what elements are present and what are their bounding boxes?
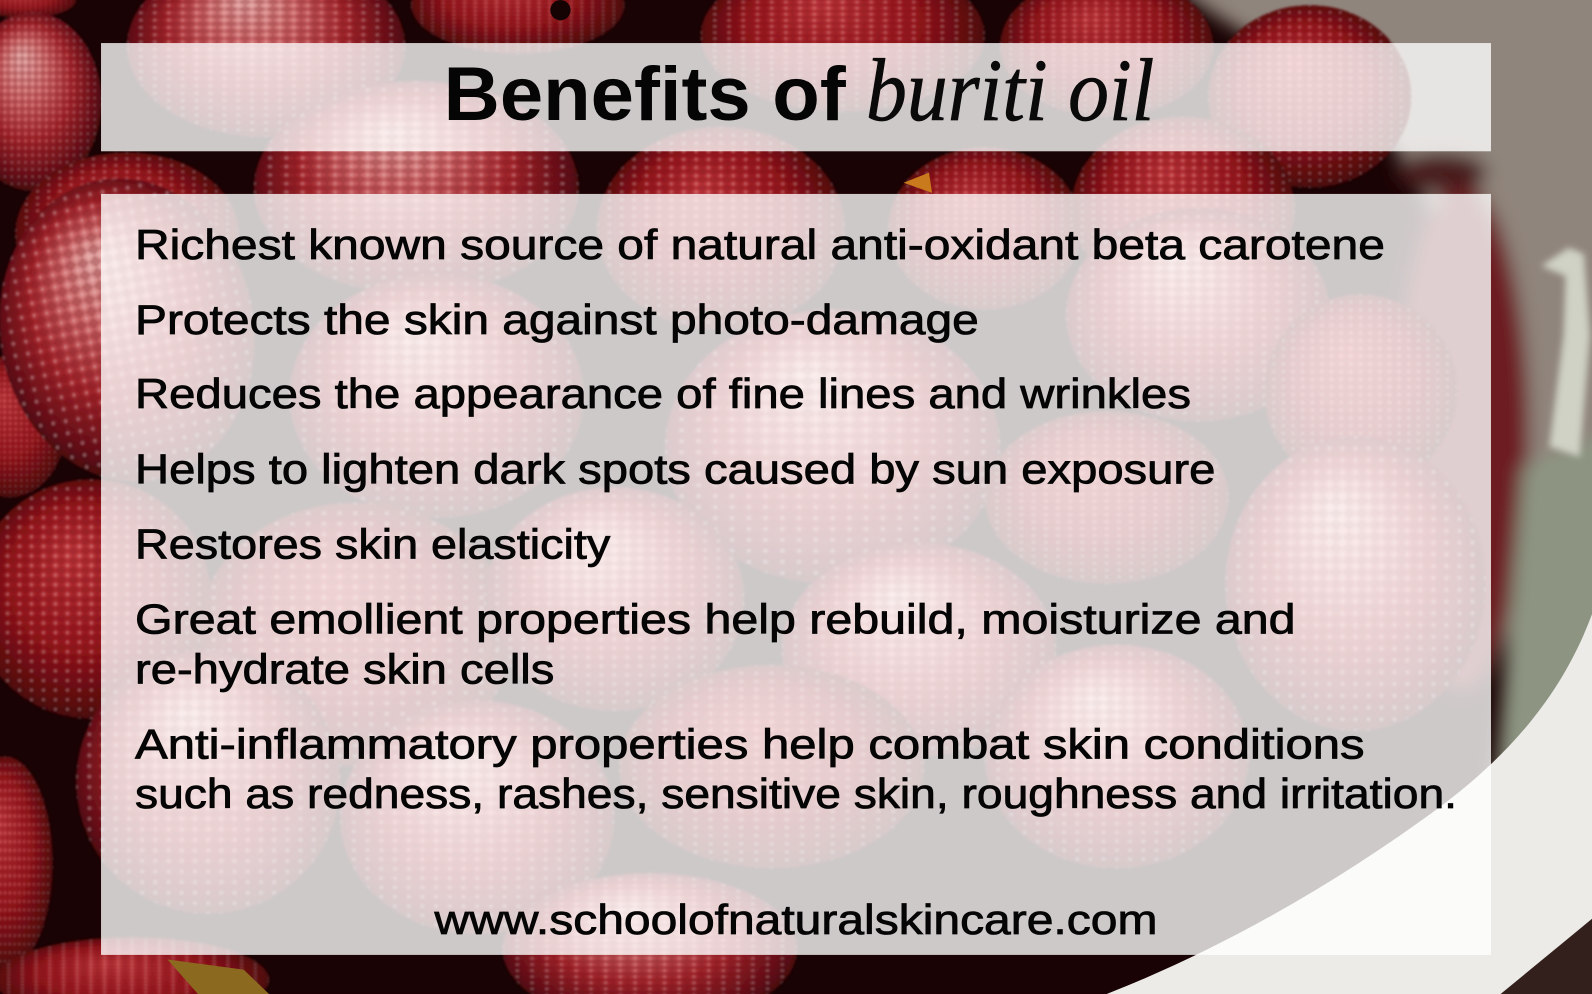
website url: www.schoolofnaturalskincare.com <box>433 896 1157 943</box>
benefit 7: Anti-inflammatory properties help combat skin conditions <box>135 720 1365 767</box>
benefit 6: re-hydrate skin cells <box>135 645 554 692</box>
title: buriti oil script: buriti oil <box>866 41 1154 140</box>
title <box>444 41 1154 140</box>
benefit 2: Protects the skin against photo-damage <box>135 296 979 343</box>
benefit 5: Restores skin elasticity <box>135 520 610 567</box>
benefits text <box>135 221 1457 817</box>
benefit 4: Helps to lighten dark spots caused by sun exposure <box>135 445 1215 492</box>
panel: title bar <box>101 43 1491 151</box>
benefit 6 <box>135 596 1296 692</box>
title: Benefits of: Benefits of <box>444 52 846 137</box>
panel: benefits list <box>101 194 1491 955</box>
benefit 7: such as redness, rashes, sensitive skin, roughness and irritation. <box>135 770 1457 817</box>
benefit 1: Richest known source of natural anti-oxidant beta carotene <box>135 221 1385 268</box>
fruit details <box>550 0 571 20</box>
benefit 6: Great emollient properties help rebuild, moisturize and <box>135 596 1296 643</box>
benefit 3: Reduces the appearance of fine lines and wrinkles <box>135 370 1191 417</box>
benefit 7 <box>135 720 1457 817</box>
bowl interior and rim <box>1107 0 1592 994</box>
